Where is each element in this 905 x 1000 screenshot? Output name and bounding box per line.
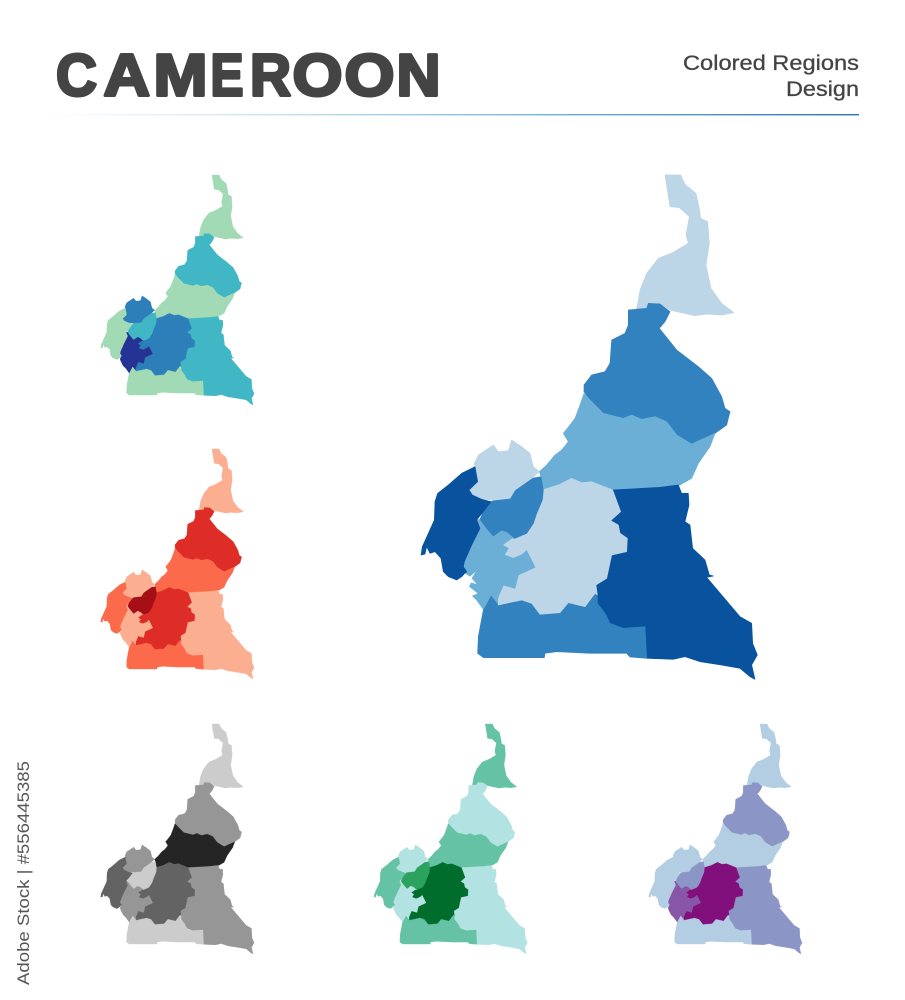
stock credit: Adobe Stock | #556445385 bbox=[14, 761, 33, 985]
title: E bbox=[210, 42, 244, 108]
subtitle: colored regions design: Colored Regions bbox=[683, 52, 859, 75]
map: green variant bbox=[374, 724, 527, 954]
title: N bbox=[396, 42, 440, 108]
title: C bbox=[56, 42, 97, 108]
title: O bbox=[344, 42, 394, 108]
map: purple variant bbox=[649, 724, 802, 954]
map: teal variant bbox=[101, 175, 254, 405]
title: M bbox=[154, 42, 208, 108]
title: O bbox=[292, 42, 342, 108]
title: R bbox=[250, 42, 291, 108]
subtitle: colored regions design bbox=[683, 52, 859, 101]
map: red variant bbox=[101, 449, 254, 679]
map: gray variant bbox=[101, 724, 254, 954]
subtitle: colored regions design: Design bbox=[786, 78, 859, 101]
title bbox=[56, 42, 440, 108]
title: A bbox=[104, 42, 150, 108]
map: large blue Cameroon bbox=[421, 175, 757, 679]
